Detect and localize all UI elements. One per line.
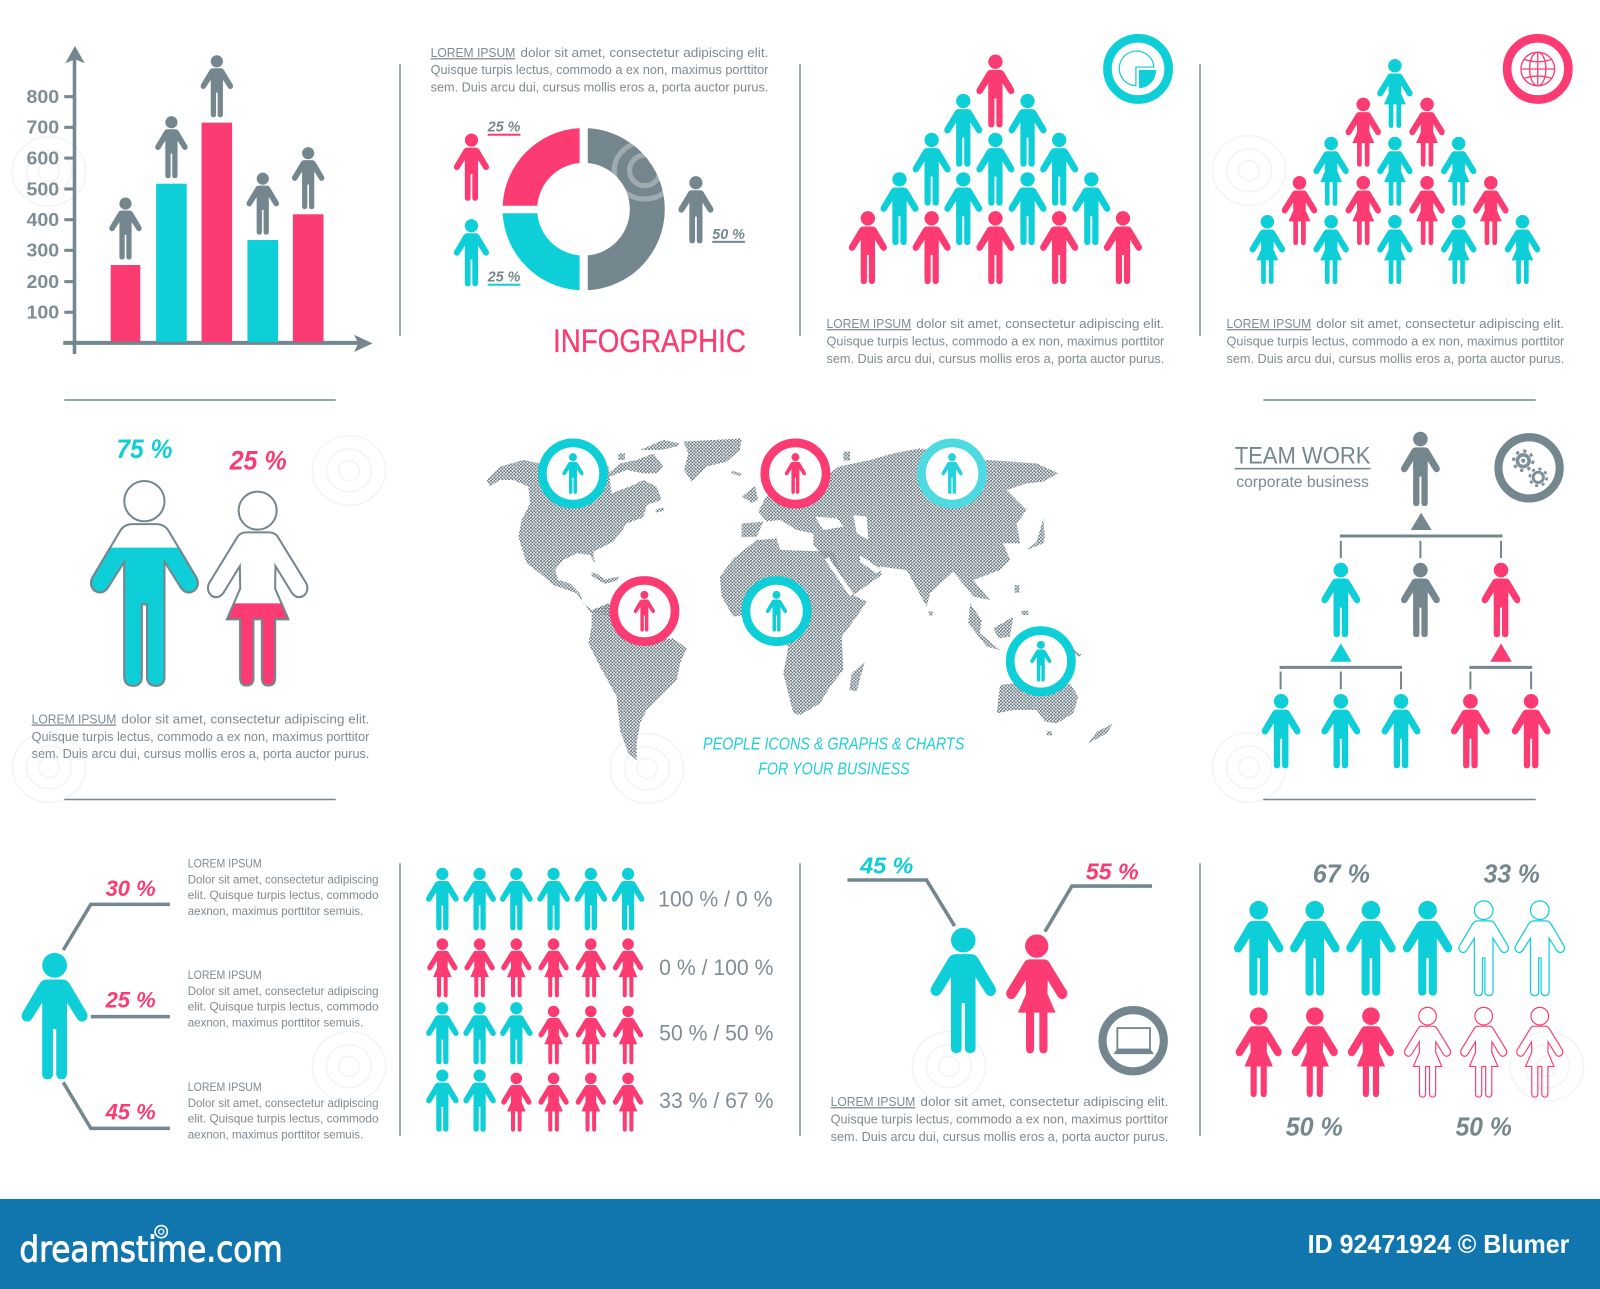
panel: bar chart with people [27, 46, 372, 354]
y and x axes with arrows [63, 46, 372, 354]
axis labels: 700 [27, 117, 59, 138]
panel: gender ratio rows: 33 % / 67 % [659, 1088, 774, 1113]
text block: gender figures: LOREM IPSUM [32, 711, 116, 726]
text block: top donut panel [431, 45, 769, 94]
panel: gender ratio rows: 100 % / 0 % [658, 887, 772, 912]
panel: gender ratio rows: 50 % / 50 % [659, 1021, 774, 1046]
footer logo: dreamstime.com [19, 1230, 283, 1271]
axis labels: 300 [27, 240, 59, 261]
text block: top donut panel: sem. Duis arcu dui, cursus mollis eros a, porta auctor purus. [431, 79, 768, 94]
text block: male pyramid: LOREM IPSUM [827, 316, 911, 331]
map pin: south america [614, 580, 675, 642]
text block: male pyramid: Quisque turpis lectus, commodo a ex non, maximus porttitor [827, 333, 1165, 348]
map pin: oceania [1010, 631, 1071, 692]
panel: donut chart: 25 % [487, 270, 520, 286]
text block: second [188, 969, 379, 1030]
footer band [0, 1199, 1600, 1289]
text block: gender figures: dolor sit amet, consectetur adipiscing elit. [121, 711, 369, 726]
map caption: FOR YOUR BUSINESS [758, 759, 910, 779]
heading: infographic: INFOGRAPHIC [553, 322, 746, 359]
map caption: PEOPLE ICONS & GRAPHS & CHARTS [703, 734, 965, 754]
panel: male people pyramid [849, 55, 1142, 284]
text block: second: Dolor sit amet, consectetur adipiscing [188, 985, 379, 998]
panel: donut chart [454, 120, 745, 290]
text block: man and woman: Quisque turpis lectus, commodo a ex non, maximus porttitor [831, 1111, 1169, 1126]
panel: gender ratio rows [426, 868, 774, 1132]
text block: female pyramid: sem. Duis arcu dui, cursus mollis eros a, porta auctor purus. [1227, 351, 1564, 366]
panel: person with three percentages: 45 % [105, 1099, 156, 1124]
axis labels: 500 [27, 178, 59, 199]
panel: donut chart: 50 % [712, 227, 745, 243]
text block: male pyramid: dolor sit amet, consectetur adipiscing elit. [916, 316, 1164, 331]
panel: female people pyramid [1250, 59, 1540, 284]
panel: filled and outlined people: 67 % [1313, 861, 1370, 889]
text block: third: elit. Quisque turpis lectus, commodo [188, 1112, 379, 1125]
icon: pie chart badge [1107, 38, 1169, 100]
panel: man and woman callouts [847, 852, 1164, 1071]
panel: gender fill figures: 25 % [229, 445, 287, 475]
bars [111, 123, 323, 342]
axis labels: 600 [27, 147, 59, 168]
text block: female pyramid: Quisque turpis lectus, commodo a ex non, maximus porttitor [1227, 333, 1565, 348]
text block: man and woman [831, 1094, 1169, 1144]
text block: gender figures: Quisque turpis lectus, commodo a ex non, maximus porttitor [32, 729, 370, 744]
panel: gender fill figures [91, 434, 307, 686]
triangles [1330, 513, 1512, 662]
axis labels [27, 86, 59, 322]
axis labels: 200 [27, 271, 59, 292]
text block: third [188, 1081, 379, 1141]
panel: donut chart: 25 % [487, 120, 520, 136]
text block: gender figures [32, 711, 370, 761]
text block: first: elit. Quisque turpis lectus, commodo [188, 889, 379, 902]
panel: dotted world map [487, 438, 1113, 760]
axis labels: 400 [27, 209, 59, 230]
icon: laptop badge [1103, 1010, 1164, 1071]
map pin: europe [765, 443, 826, 504]
text block: top donut panel: dolor sit amet, consectetur adipiscing elit. [520, 45, 768, 60]
axis labels: 100 [27, 301, 59, 322]
text block: first: LOREM IPSUM [188, 857, 262, 870]
map pin: north america [542, 443, 604, 504]
text block: first: aexnon, maximus porttitor semuis. [188, 905, 363, 918]
text block: third: LOREM IPSUM [188, 1081, 262, 1094]
panel: man and woman callouts: 55 % [1086, 859, 1139, 885]
panel: filled and outlined people: 50 % [1286, 1114, 1343, 1142]
people on bars [109, 55, 324, 260]
org connectors [1280, 536, 1532, 689]
text block: gender figures: sem. Duis arcu dui, cursus mollis eros a, porta auctor purus. [32, 746, 369, 761]
panel: filled and outlined people [1234, 861, 1565, 1142]
map pin: africa [746, 580, 807, 642]
text block: second: aexnon, maximus porttitor semuis. [188, 1017, 363, 1030]
map caption [703, 734, 965, 778]
panel: gender ratio rows: 0 % / 100 % [659, 955, 774, 980]
text block: top donut panel: LOREM IPSUM [431, 45, 515, 60]
text block: male pyramid [827, 316, 1165, 366]
panel: person with three percentages: 30 % [106, 876, 156, 901]
text block: female pyramid: LOREM IPSUM [1227, 316, 1311, 331]
text block: female pyramid [1227, 316, 1565, 366]
footer credit: ID 92471924 © Blumer [1308, 1231, 1569, 1259]
text block: male pyramid: sem. Duis arcu dui, cursus mollis eros a, porta auctor purus. [827, 351, 1164, 366]
heading: team work: corporate business [1236, 474, 1369, 491]
icon: globe badge [1507, 38, 1568, 100]
panel: team work org chart [1235, 432, 1560, 768]
panel: gender fill figures: 75 % [116, 434, 172, 464]
heading: team work: TEAM WORK [1235, 442, 1371, 469]
text block: man and woman: dolor sit amet, consectetur adipiscing elit. [920, 1094, 1168, 1109]
text block: female pyramid: dolor sit amet, consectetur adipiscing elit. [1316, 316, 1564, 331]
org people [1262, 432, 1551, 768]
icon: gears badge [1498, 437, 1560, 498]
text block: man and woman: LOREM IPSUM [831, 1094, 915, 1109]
text block: first: Dolor sit amet, consectetur adipiscing [188, 873, 379, 886]
text block: man and woman: sem. Duis arcu dui, cursus mollis eros a, porta auctor purus. [831, 1129, 1168, 1144]
text block: top donut panel: Quisque turpis lectus, commodo a ex non, maximus porttitor [431, 62, 769, 77]
panel: person with three percentages: 25 % [105, 988, 156, 1013]
text block: second: LOREM IPSUM [188, 969, 262, 982]
text block: first [188, 857, 379, 918]
text block: third: Dolor sit amet, consectetur adipiscing [188, 1097, 379, 1110]
panel: man and woman callouts: 45 % [859, 852, 913, 878]
text block: second: elit. Quisque turpis lectus, commodo [188, 1001, 379, 1014]
panel: filled and outlined people: 50 % [1456, 1114, 1512, 1142]
map pin: asia [921, 443, 983, 504]
panel: filled and outlined people: 33 % [1484, 861, 1540, 889]
text block: third: aexnon, maximus porttitor semuis. [188, 1128, 363, 1141]
panel: person with three percentages [22, 857, 379, 1141]
heading: team work [1235, 442, 1371, 491]
axis labels: 800 [27, 86, 59, 107]
